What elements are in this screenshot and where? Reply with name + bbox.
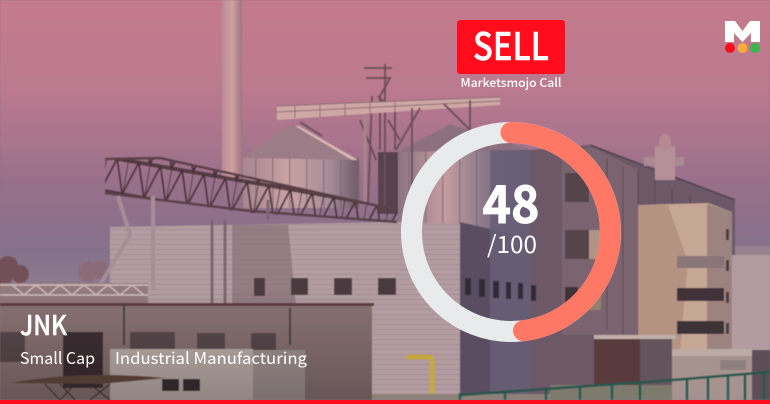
logo dot: orange — [738, 43, 748, 53]
dark block between silos — [378, 152, 400, 214]
white tank — [732, 255, 770, 355]
company name: JNK — [20, 304, 67, 343]
recommendation badge: SELL: SELL — [473, 16, 549, 71]
beige block — [638, 203, 732, 350]
elevator tower — [360, 64, 400, 205]
far trees right — [733, 246, 770, 255]
tree left — [0, 256, 29, 286]
truss supports — [100, 196, 268, 308]
roof equipment — [644, 134, 684, 180]
yellow gas pipe — [406, 357, 432, 394]
industry: Industrial Manufacturing — [115, 345, 307, 369]
inclined truss bridge — [105, 158, 397, 222]
bottom red bar — [0, 400, 770, 404]
ring progress: 48 of 100 — [511, 132, 610, 331]
facade windows — [465, 173, 601, 310]
truss shadow on wall — [232, 225, 296, 306]
badge caption: Marketsmojo Call — [460, 74, 562, 91]
score scale: /100 — [487, 225, 537, 260]
upper conveyor — [277, 97, 500, 205]
wall windows — [254, 278, 396, 296]
silo right — [398, 124, 532, 390]
chimney — [222, 0, 242, 180]
tree behind building — [78, 261, 109, 282]
logo dot: red — [725, 43, 735, 53]
score value: 48 — [482, 163, 540, 238]
entrance canopy and door — [594, 335, 676, 385]
logo dot: green — [750, 43, 760, 53]
ground and fence — [372, 372, 770, 400]
small annex — [672, 349, 770, 400]
dark facade — [460, 145, 735, 396]
market cap category: Small Cap — [20, 345, 95, 369]
silo left — [242, 126, 359, 208]
main plant wall — [110, 222, 460, 396]
score ring — [412, 132, 610, 332]
pipe bridge lower left — [0, 283, 148, 303]
ring track — [412, 132, 610, 332]
bottom dark overlay — [0, 290, 372, 400]
low foreground building — [0, 303, 374, 400]
logo: Marketsmojo — [725, 21, 760, 53]
